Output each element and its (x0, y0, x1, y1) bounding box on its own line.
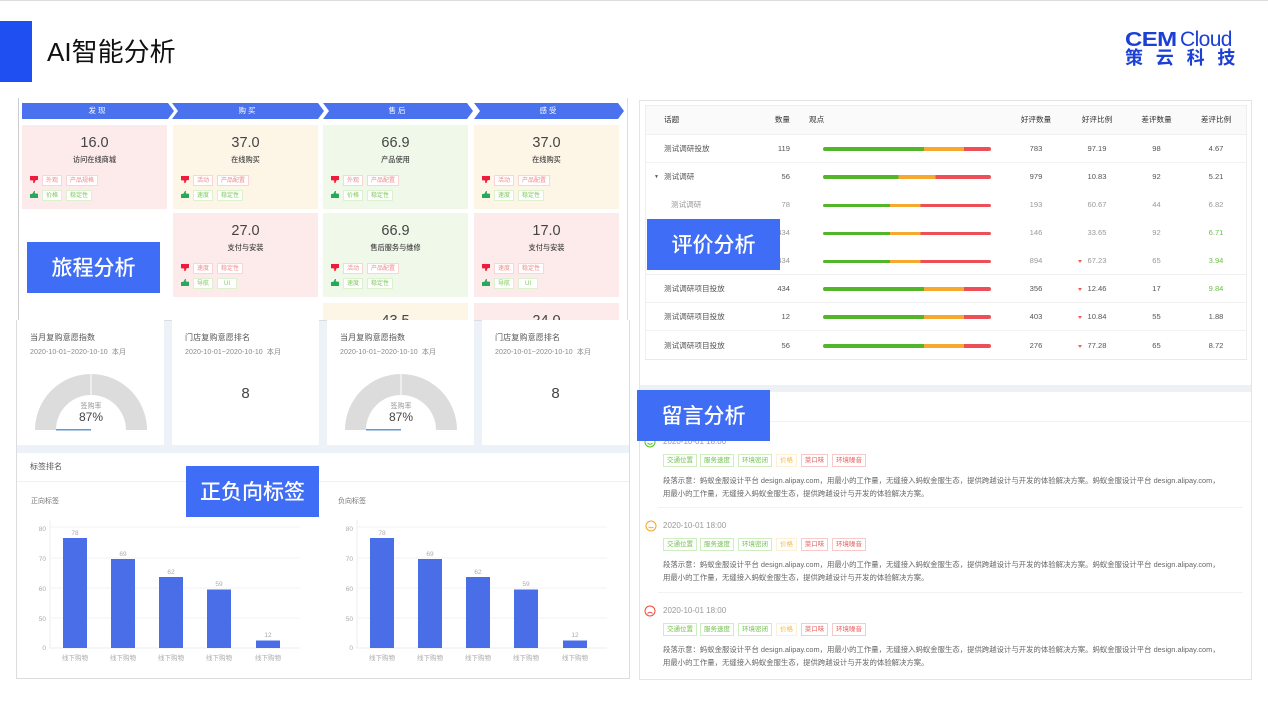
label: 正负向标签: 正负向标签 (200, 481, 305, 504)
bar chart: 正向标签: 12 (264, 632, 272, 639)
kpi card: 当月复购意愿指数 gauge (327, 320, 474, 445)
title: AI智能分析 (47, 37, 176, 67)
card: 在线购买 37.0: 37.0 (231, 135, 260, 151)
row 3: 78 (782, 200, 790, 209)
row 5: 测试调研项目投放 (671, 256, 732, 265)
bar chart: 负向标签: 62 (474, 569, 482, 576)
kpi card: 当月复购意愿指数 gauge: 当月复购意愿指数 (30, 333, 95, 342)
card: 售后服务与维修 66.9: 稳定性 (371, 281, 389, 287)
card: 支付与安装 17.0: 速度 (498, 266, 510, 272)
row 8: 8.72 (1209, 341, 1223, 350)
comment tags (663, 454, 866, 467)
card: 支付与安装 17.0 (474, 213, 619, 297)
comment 3: negative: 2020-10-01 18:00 (663, 606, 726, 615)
bar chart: 正向标签: 线下购物 (158, 653, 184, 662)
bar chart: 正向标签: 50 (39, 616, 46, 623)
comment tags: 环境噪音 (836, 626, 862, 633)
kpi card: 门店复购意愿排名: 2020-10-01~2020-10-10 本月 (495, 349, 591, 356)
bar chart: 正向标签 (31, 496, 300, 662)
row 2 (654, 172, 1223, 181)
label: 旅程分析: 旅程分析 (52, 257, 136, 280)
card: 支付与安装 17.0: 导航 (498, 281, 510, 287)
row 4 (671, 228, 1223, 237)
card: 访问在线商城 16.0: 产品规格 (70, 178, 94, 184)
row 4: 92 (1152, 228, 1161, 237)
bar chart: 正向标签: 80 (39, 526, 46, 533)
row 3: 6.82 (1209, 200, 1223, 209)
label: 评价分析: 评价分析 (672, 234, 756, 257)
row 5: 434 (777, 256, 790, 265)
comment tags: 环境噪音 (836, 457, 862, 464)
card: 售后服务与维修 66.9 (323, 213, 468, 297)
comment text: 段落示意：蚂蚁金服设计平台 design.alipay.com，用最小的工作量，无缝接入蚂蚁金服生态，提供跨越设计与开发的体验解决方案。蚂蚁金服设计平台 design.alipay.com， (663, 560, 1220, 569)
table header row: 好评数量 (1021, 115, 1051, 124)
comment tags: 菜口味 (805, 626, 824, 633)
comment text (663, 560, 1220, 582)
bar chart: 正向标签: 线下购物 (110, 653, 136, 662)
card: 在线购买 37.0: 37.0 (532, 135, 561, 151)
bar chart: 负向标签 (338, 496, 607, 662)
kpi card: 当月复购意愿指数 gauge: 签购率 (80, 401, 102, 410)
card: 产品使用 66.9: 产品配置 (371, 178, 395, 184)
bar chart: 负向标签: 59 (522, 581, 530, 588)
row 7: 1.88 (1209, 312, 1223, 321)
comment tags: 服务速度 (704, 541, 730, 548)
row 2: 92 (1152, 172, 1161, 181)
journey stage: 售后: 售后 (388, 106, 408, 115)
card: 支付与安装 27.0: 稳定性 (221, 266, 239, 272)
kpi card: 当月复购意愿指数 gauge: 2020-10-01~2020-10-10 本月 (340, 349, 436, 356)
bar chart: 正向标签: 线下购物 (255, 653, 282, 662)
bar chart: 负向标签: 线下购物 (513, 653, 540, 662)
bar chart: 负向标签: 0 (349, 645, 353, 652)
card: 在线购买 37.0: 产品配置 (522, 178, 546, 184)
card: 支付与安装 27.0: 27.0 (231, 223, 260, 239)
comment text: 用最小的工作量，无缝接入蚂蚁金服生态，提供跨越设计与开发的体验解决方案。 (663, 658, 928, 667)
kpi card: 门店复购意愿排名: 门店复购意愿排名 (495, 333, 560, 342)
kpi card: 当月复购意愿指数 gauge: 87% (389, 410, 413, 424)
bar chart: 正向标签: 69 (119, 551, 127, 558)
comment text (663, 476, 1220, 498)
row 4: 33.65 (1087, 228, 1106, 237)
logo: CEMCloud 策云科技: 策云科技 (1125, 48, 1248, 68)
bar chart: 负向标签: 70 (346, 556, 353, 563)
row 4: 6.71 (1209, 228, 1223, 237)
card: 支付与安装 17.0: UI (525, 281, 531, 287)
card: 在线购买 37.0: 稳定性 (221, 193, 239, 199)
card: 支付与安装 27.0: 速度 (197, 266, 209, 272)
label: 留言分析 (637, 390, 770, 441)
row 1: 98 (1152, 144, 1161, 153)
row 8: 测试调研项目投放 (664, 341, 725, 350)
comment tags: 服务速度 (704, 626, 730, 633)
table header row: 差评数量 (1141, 115, 1172, 124)
row 1: 4.67 (1209, 144, 1223, 153)
row 7: 55 (1152, 312, 1161, 321)
comment tags: 交通位置 (667, 457, 693, 464)
card: 产品使用 66.9 (323, 125, 468, 209)
row 2: 979 (1030, 172, 1042, 181)
label: 留言分析: 留言分析 (662, 405, 746, 428)
row 7 (646, 303, 1246, 331)
card: 访问在线商城 16.0 (22, 125, 167, 209)
row 5: 3.94 (1209, 256, 1223, 265)
journey stage: 购买 (172, 103, 324, 119)
row 3: 44 (1152, 200, 1161, 209)
bar chart: 正向标签: 59 (215, 581, 223, 588)
card: 在线购买 37.0: 在线购买 (231, 155, 260, 164)
bar chart: 负向标签: 线下购物 (417, 653, 444, 662)
icon: green smile (644, 441, 656, 448)
card: 售后服务与维修 66.9: 活动 (347, 266, 359, 272)
heading: 标签排名: 标签排名 (30, 462, 62, 471)
table header row: 数量 (775, 115, 790, 124)
card: 支付与安装 27.0: UI (224, 281, 230, 287)
comment text (663, 645, 1220, 667)
card: 在线购买 37.0: 活动 (498, 178, 510, 184)
row 7: 10.84 (1087, 312, 1106, 321)
journey stage: 购买: 购买 (238, 106, 258, 115)
bar chart: 正向标签: 正向标签 (31, 496, 59, 505)
card: 访问在线商城 16.0: 价格 (46, 193, 58, 199)
row 5 (646, 247, 1246, 275)
card: 在线购买 37.0 (173, 125, 318, 209)
row 8: 276 (1030, 341, 1042, 350)
row 4: 测试调研项目投放 (671, 228, 732, 237)
bar chart: 负向标签: 80 (346, 526, 353, 533)
row 2: ▼ (654, 174, 659, 180)
comment text: 用最小的工作量，无缝接入蚂蚁金服生态，提供跨越设计与开发的体验解决方案。 (663, 573, 928, 582)
row 8 (664, 341, 1223, 350)
kpi card: 当月复购意愿指数 gauge: 2020-10-01~2020-10-10 本月 (30, 349, 126, 356)
icon: red sad face (644, 606, 656, 616)
comment 2: neutral: 2020-10-01 18:00 (663, 521, 726, 530)
comment tags: 环境密闭 (742, 541, 768, 548)
card: 支付与安装 27.0 (173, 213, 318, 297)
row 7: 403 (1030, 312, 1042, 321)
row 1 (646, 135, 1246, 163)
bar chart: 正向标签: 78 (71, 530, 79, 537)
card: 在线购买 37.0: 在线购买 (532, 155, 561, 164)
comment tags: 服务速度 (704, 457, 730, 464)
bar chart: 负向标签: 60 (346, 586, 353, 593)
card: 售后服务与维修 66.9: 66.9 (381, 223, 410, 239)
row 8: 65 (1152, 341, 1161, 350)
journey stage: 感受: 感受 (540, 106, 558, 115)
row 1: 测试调研投放 (664, 144, 710, 153)
logo: CEMCloud 策云科技: Cloud (1180, 28, 1232, 51)
card: 在线购买 37.0: 活动 (197, 178, 209, 184)
card: 售后服务与维修 66.9: 产品配置 (371, 266, 395, 272)
comment 3: negative (644, 606, 1220, 667)
kpi card: 门店复购意愿排名: 8 (551, 385, 560, 402)
table header row: 好评比例 (1082, 115, 1112, 124)
row 6: 17 (1152, 284, 1161, 293)
table header row: 话题 (664, 115, 679, 124)
logo: CEMCloud 策云科技 (1125, 28, 1248, 68)
card: 在线购买 37.0 (474, 125, 619, 209)
card: 产品使用 66.9: 产品使用 (381, 155, 410, 164)
comment 1: positive: 2020-10-01 18:00 (663, 437, 726, 446)
comment 1: positive (644, 437, 1220, 498)
card: 售后服务与维修 66.9: 售后服务与维修 (370, 243, 421, 252)
kpi card: 门店复购意愿排名 (482, 320, 629, 445)
journey stage: 发现 (22, 103, 174, 119)
journey stage: 售后 (323, 103, 473, 119)
row 1: 97.19 (1087, 144, 1106, 153)
comment text: 用最小的工作量，无缝接入蚂蚁金服生态，提供跨越设计与开发的体验解决方案。 (663, 489, 928, 498)
panel: journey analysis (18, 98, 628, 321)
card: 售后服务与维修 66.9: 速度 (347, 281, 359, 287)
comment tags: 交通位置 (667, 626, 693, 633)
panel: positive and negative tags dashboard (16, 320, 630, 679)
card: 在线购买 37.0: 产品配置 (221, 178, 245, 184)
comment tags: 价格 (780, 457, 793, 464)
card: 访问在线商城 16.0: 16.0 (80, 135, 109, 151)
bar chart: 负向标签: 50 (346, 616, 353, 623)
journey stage: 发现: 发现 (88, 106, 108, 115)
row 5: 67.23 (1087, 256, 1106, 265)
logo: CEMCloud 策云科技: CEM (1125, 29, 1177, 51)
bar chart: 正向标签: 线下购物 (206, 653, 232, 662)
card: partially hidden 24.0 (474, 303, 619, 320)
row 2: 5.21 (1209, 172, 1223, 181)
row 3: 测试调研 (671, 200, 701, 209)
label: 旅程分析 (27, 242, 160, 293)
row 4: 146 (1030, 228, 1042, 237)
comment tags (663, 538, 866, 551)
comment 2: neutral (646, 520, 1220, 582)
comment tags: 环境噪音 (836, 541, 862, 548)
journey stage: 感受 (474, 103, 624, 119)
row 3: 60.67 (1087, 200, 1106, 209)
table header row (646, 106, 1246, 135)
comment tags (663, 623, 866, 636)
comment tags: 环境密闭 (742, 626, 768, 633)
bar chart: 负向标签: 线下购物 (369, 653, 396, 662)
card: 产品使用 66.9: 66.9 (381, 135, 410, 151)
row 7: 测试调研项目投放 (664, 312, 725, 321)
kpi card: 当月复购意愿指数 gauge: 签购率 (390, 401, 412, 410)
kpi card: 门店复购意愿排名 (172, 320, 319, 445)
kpi card: 当月复购意愿指数 gauge: 当月复购意愿指数 (340, 333, 405, 342)
card: 支付与安装 17.0: 17.0 (532, 223, 561, 239)
row 8: 77.28 (1087, 341, 1106, 350)
panel: review analysis and comments (639, 100, 1252, 680)
kpi card: 门店复购意愿排名: 2020-10-01~2020-10-10 本月 (185, 349, 281, 356)
card: 支付与安装 27.0: 导航 (197, 281, 209, 287)
comment tags: 菜口味 (805, 457, 824, 464)
row 5: 894 (1030, 256, 1042, 265)
kpi card: 当月复购意愿指数 gauge: 87% (79, 410, 103, 424)
table: review analysis (645, 105, 1247, 360)
row 6: 434 (777, 284, 790, 293)
card: 支付与安装 17.0: 稳定性 (522, 266, 540, 272)
comment text: 段落示意：蚂蚁金服设计平台 design.alipay.com，用最小的工作量，无缝接入蚂蚁金服生态，提供跨越设计与开发的体验解决方案。蚂蚁金服设计平台 design.alipay.com， (663, 645, 1220, 654)
table header row: 观点 (809, 115, 824, 124)
bar chart: 正向标签: 62 (167, 569, 175, 576)
card: 支付与安装 27.0: 支付与安装 (228, 243, 263, 252)
row 8: 56 (782, 341, 790, 350)
kpi card: 门店复购意愿排名: 8 (241, 385, 250, 402)
row 2: 测试调研 (664, 172, 694, 181)
comment tags: 价格 (780, 626, 793, 633)
row 6: 9.84 (1209, 284, 1223, 293)
comment tags: 环境密闭 (742, 457, 768, 464)
bar chart: 正向标签: 60 (39, 586, 46, 593)
bar chart: 负向标签: 线下购物 (562, 653, 588, 662)
row 2: 56 (782, 172, 790, 181)
card: 支付与安装 17.0: 支付与安装 (529, 243, 564, 252)
comment tags: 价格 (780, 541, 793, 548)
comment tags: 交通位置 (667, 541, 693, 548)
card: 访问在线商城 16.0: 稳定性 (70, 193, 88, 199)
card: 产品使用 66.9: 价格 (347, 193, 359, 199)
bar chart: 负向标签: 负向标签 (338, 496, 366, 505)
row 6: 测试调研项目投放 (664, 284, 725, 293)
bar chart: 负向标签: 78 (378, 530, 386, 537)
bar chart: 负向标签: 线下购物 (465, 653, 492, 662)
row 3: 193 (1030, 200, 1042, 209)
label: 评价分析 (647, 219, 780, 270)
row 2: 10.83 (1087, 172, 1106, 181)
card: 访问在线商城 16.0: 访问在线商城 (73, 155, 116, 164)
card: partially hidden 43.5 (323, 303, 468, 320)
row 1: 119 (778, 144, 790, 153)
card: 产品使用 66.9: 外观 (347, 178, 359, 184)
row 6: 356 (1030, 284, 1042, 293)
comment tags: 菜口味 (805, 541, 824, 548)
row 4: 434 (777, 228, 790, 237)
card: 在线购买 37.0: 速度 (498, 193, 510, 199)
card: 在线购买 37.0: 稳定性 (522, 193, 540, 199)
chart: bar charts of positive and negative tags (31, 496, 607, 662)
card: 访问在线商城 16.0: 外观 (46, 178, 58, 184)
kpi card: 当月复购意愿指数 gauge (17, 320, 164, 445)
bar chart: 负向标签: 12 (571, 632, 579, 639)
bar chart: 负向标签: 69 (426, 551, 434, 558)
comment text: 段落示意：蚂蚁金服设计平台 design.alipay.com，用最小的工作量，无缝接入蚂蚁金服生态，提供跨越设计与开发的体验解决方案。蚂蚁金服设计平台 design.alipay.com， (663, 476, 1220, 485)
icon: orange face (646, 520, 656, 532)
row 5: 65 (1152, 256, 1161, 265)
kpi card: 门店复购意愿排名: 门店复购意愿排名 (185, 333, 250, 342)
card: 产品使用 66.9: 稳定性 (371, 193, 389, 199)
row 3 (671, 200, 1223, 209)
row 6: 12.46 (1087, 284, 1106, 293)
row 7: 12 (782, 312, 790, 321)
label: 正负向标签 (186, 466, 319, 517)
row 6 (646, 275, 1246, 303)
row 1: 783 (1030, 144, 1042, 153)
bar chart: 正向标签: 70 (39, 556, 46, 563)
table header row: 差评比例 (1201, 115, 1231, 124)
bar chart: 正向标签: 0 (42, 645, 46, 652)
header accent block (0, 21, 32, 82)
card: 在线购买 37.0: 速度 (197, 193, 209, 199)
bar chart: 正向标签: 线下购物 (62, 653, 88, 662)
